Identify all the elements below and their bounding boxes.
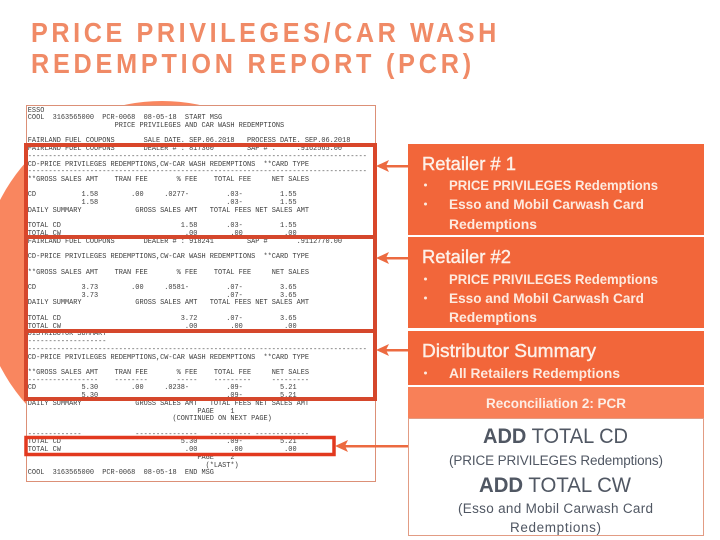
list: retailer 1 redemptions: PRICE PRIVILEGES Redemptions — [449, 178, 658, 193]
list: retailer 2 redemptions: Esso and Mobil Carwash Card — [449, 291, 644, 306]
instruction: add total CD: ADD TOTAL CD — [483, 425, 628, 448]
list: retailer 2 redemptions — [424, 272, 658, 325]
note: carwash cards — [458, 501, 653, 535]
report document scan: ESSO COOL 3163565000 PCR-0068 08-05-18 START MSG PRICE PRIVILEGES AND CAR WASH REDEMPTIONS FAIRLAND FUEL COUPONS SALE DATE. SEP.06.2018 PROCESS DATE. SEP.06.2018 FAIRLAND FUEL COUPONS DEALER # : 817360 SAP # . .9162565.00 ---------------------------------------------------------------------------------- CD-PRICE PRIVILEGES REDEMPTIONS,CW-CAR WASH REDEMPTIONS **CARD TYPE ---------------------------------------------------------------------------------- **GROSS SALES AMT TRAN FEE % FEE TOTAL FEE NET SALES CD 1.58 .00 .0277- .03- 1.55 1.58 .03- 1.55 DAILY SUMMARY GROSS SALES AMT TOTAL FEES NET SALES AMT TOTAL CD 1.58 .03- 1.55 TOTAL CW .00 .00 .00 FAIRLAND FUEL COUPONS DEALER # : 918241 SAP # .9112770.00 CD-PRICE PRIVILEGES REDEMPTIONS,CW-CAR WASH REDEMPTIONS **CARD TYPE **GROSS SALES AMT TRAN FEE % FEE TOTAL FEE NET SALES CD 3.73 .00 .0581- .07- 3.65 3.73 .07- 3.65 DAILY SUMMARY GROSS SALES AMT TOTAL FEES NET SALES AMT TOTAL CD 3.72 .07- 3.65 TOTAL CW .00 .00 .00 DISTRIBUTOR SUMMARY ------------------- ---------------------------------------------------------------------------------- CD-PRICE PRIVILEGES REDEMPTIONS,CW-CAR WASH REDEMPTIONS **CARD TYPE **GROSS SALES AMT TRAN FEE % FEE TOTAL FEE NET SALES ----------------- -------- ----- --------- --------- CD 5.30 .00 .0238- .09- 5.21 5.30 .09- 5.21 DAILY SUMMARY GROSS SALES AMT TOTAL FEES NET SALES AMT PAGE 1 (CONTINUED ON NEXT PAGE) ------------- --------------- ---------- ------------- TOTAL CD 5.30 .09- 5.21 TOTAL CW .00 .00 .00 PAGE 2 (*LAST*) COOL 3163565000 PCR-0068 08-05-18 END MSG — [28, 106, 367, 477]
arrow: distributor summary — [376, 344, 408, 356]
arrow: retailer 1 — [376, 160, 408, 172]
panel: reconciliation header: Reconciliation 2: PCR — [486, 396, 626, 411]
arrow: totals — [335, 440, 408, 452]
highlight: retailer 2 section — [26, 237, 375, 331]
panel: reconciliation header — [408, 387, 704, 418]
panel: retailer 2 — [408, 237, 704, 328]
panel: retailer 1 — [408, 144, 704, 235]
list: retailer 2 redemptions: PRICE PRIVILEGES Redemptions — [449, 272, 658, 287]
title: REDEMPTION REPORT (PCR) — [31, 48, 471, 79]
list: retailer 1 redemptions: Redemptions — [449, 217, 537, 232]
note: price privileges: (PRICE PRIVILEGES Redemptions) — [449, 453, 663, 468]
list: retailer 1 redemptions — [424, 178, 658, 232]
heading: retailer 1: Retailer # 1 — [422, 154, 516, 174]
panel: distributor summary — [408, 331, 704, 385]
panel: reconciliation instructions — [408, 418, 704, 536]
note: carwash cards: (Esso and Mobil Carwash Card — [458, 501, 653, 516]
list: retailer 2 redemptions: Redemptions — [449, 310, 537, 325]
instruction: add total CW: ADD TOTAL CW — [479, 474, 631, 497]
heading: distributor summary: Distributor Summary — [422, 341, 596, 361]
highlight: retailer 1 section — [26, 145, 375, 237]
arrow: retailer 2 — [376, 252, 408, 264]
title — [31, 17, 496, 79]
list: distributor redemptions: All Retailers Redemptions — [449, 366, 620, 381]
title: PRICE PRIVILEGES/CAR WASH — [31, 17, 496, 48]
note: carwash cards: Redemptions) — [510, 520, 601, 535]
heading: retailer 2: Retailer #2 — [422, 247, 511, 267]
list: retailer 1 redemptions: Esso and Mobil Carwash Card — [449, 197, 644, 212]
highlight: totals rows — [26, 438, 334, 454]
highlight: distributor summary section — [26, 331, 375, 399]
